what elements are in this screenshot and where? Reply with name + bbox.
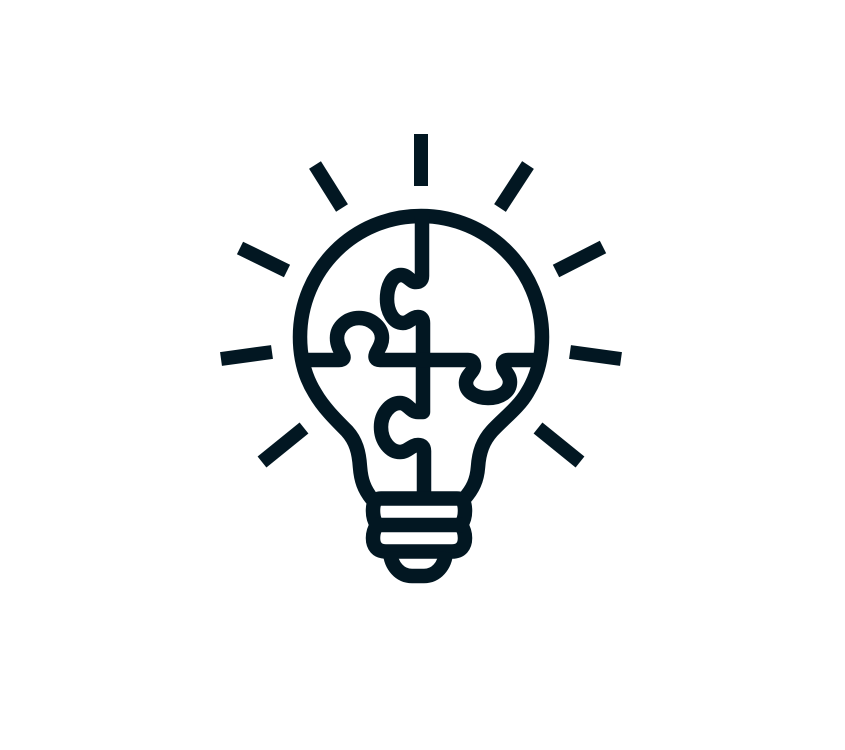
- icon: bulb glass outline: [300, 216, 542, 499]
- icon: light rays: [221, 134, 621, 462]
- icon: puzzle seams: [308, 216, 535, 492]
- icon: bulb screw base: [373, 498, 465, 576]
